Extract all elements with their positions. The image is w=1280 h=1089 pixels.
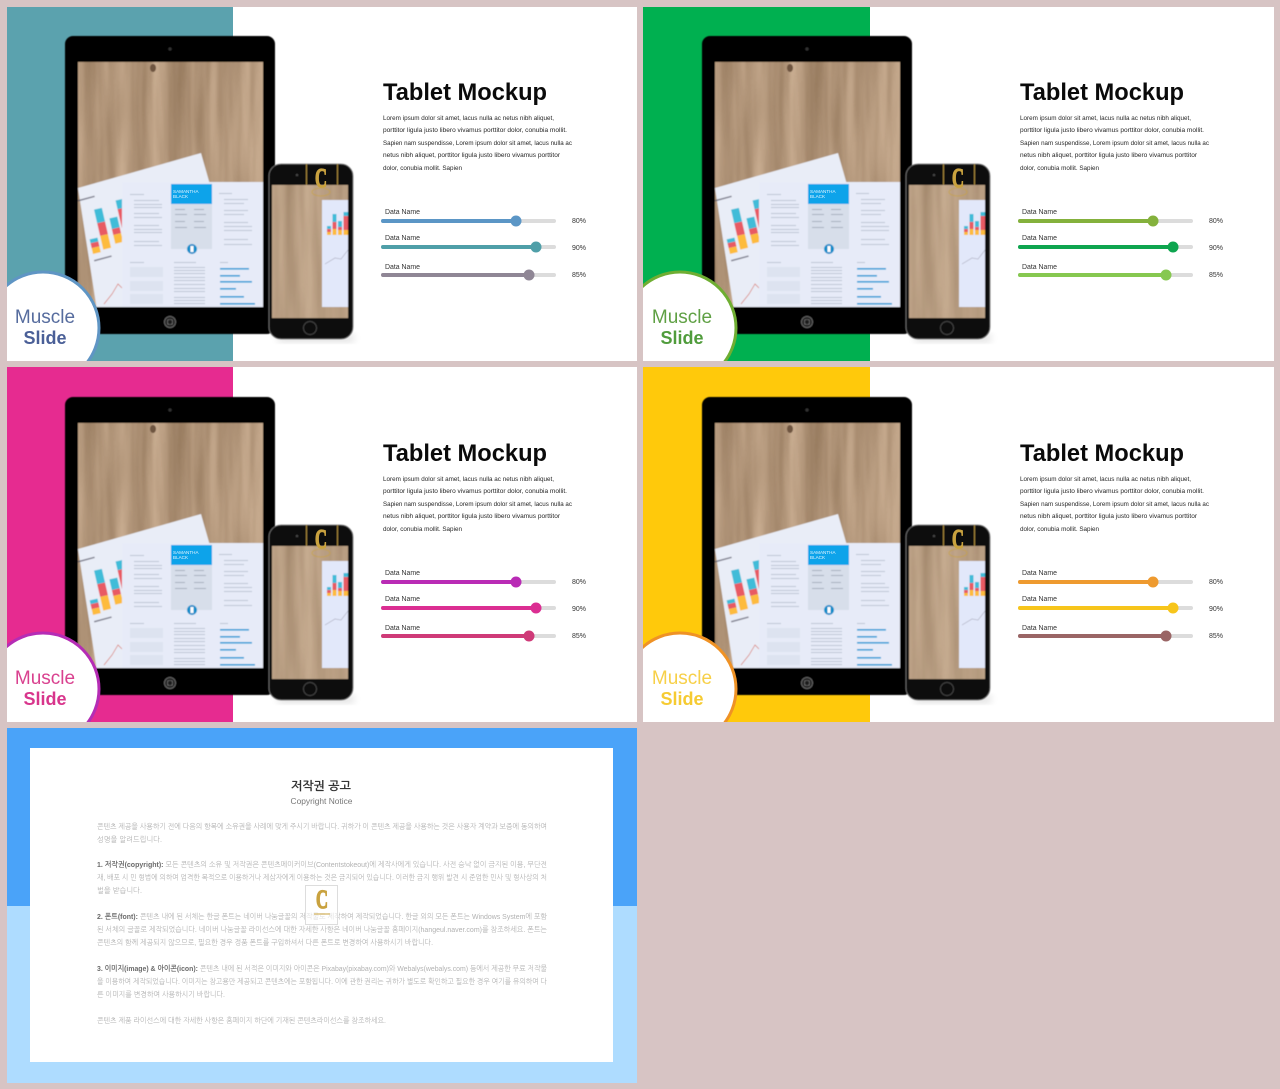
badge: Muscle Slide: [7, 632, 100, 722]
watermark: C: [315, 524, 327, 554]
body text: [383, 476, 573, 533]
body text: dolor, conubia mollit. Sapien: [383, 165, 462, 172]
paragraph 1: copyright: [97, 860, 547, 895]
slider: data 90%: Data Name: [1022, 596, 1057, 603]
slider: data 90%: 90%: [572, 245, 586, 252]
badge: Muscle Slide: [643, 632, 738, 722]
slider: data 80%: [1018, 209, 1223, 226]
badge: Muscle Slide: [643, 270, 738, 361]
resume header text: BLACK: [810, 555, 826, 560]
slider: data 85%: [1018, 625, 1223, 642]
intro paragraph: 성명을 알려드립니다.: [97, 835, 162, 844]
paragraph 2: font: 콘텐츠의 함께 제공되지 않으므로, 필요한 경우 정품 폰트를 구입하셔서 다른 폰트로 변경하여 사용하시기 바랍니다.: [97, 938, 433, 947]
badge: Muscle Slide: [7, 270, 100, 361]
heading: Tablet Mockup: [1020, 440, 1184, 467]
slider: data 85%: Data Name: [1022, 264, 1057, 271]
slider: data 90%: Data Name: [1022, 235, 1057, 242]
badge: Muscle Slide: Muscle: [15, 307, 75, 328]
notice subtitle: Copyright Notice: [291, 796, 353, 806]
tablet and phone mockup: [65, 36, 354, 342]
badge: Muscle Slide: Muscle: [15, 668, 75, 689]
badge: Muscle Slide: Slide: [660, 689, 704, 709]
paragraph 2: font: [97, 912, 548, 947]
resume header text: BLACK: [173, 194, 189, 199]
slider: data 80%: Data Name: [1022, 570, 1057, 577]
slider: data 85%: Data Name: [385, 264, 420, 271]
slider: data 90%: [1018, 235, 1223, 252]
colour band: [643, 367, 870, 722]
body text: Sapien nam suspendisse, Lorem ipsum dolor sit amet, lacus nulla ac: [1020, 501, 1210, 508]
body text: porttitor ligula justo libero vivamus porttitor dolor, conubia mollit.: [383, 127, 567, 134]
slider: data 90%: 90%: [572, 606, 586, 613]
body text: dolor, conubia mollit. Sapien: [1020, 165, 1099, 172]
resume header text: SAMANTHA: [810, 550, 836, 555]
slider: data 80%: [1018, 570, 1223, 588]
slider: data 85%: [1018, 264, 1223, 280]
slider: data 90%: 90%: [1209, 245, 1223, 252]
slider: data 85%: 85%: [1209, 633, 1223, 640]
badge: Muscle Slide: Slide: [23, 328, 67, 348]
slider: data 80%: 80%: [1209, 579, 1223, 586]
panel: copyright notice: [7, 728, 637, 1083]
resume header text: SAMANTHA: [173, 189, 199, 194]
slider: data 85%: Data Name: [385, 625, 420, 632]
slider: data 90%: Data Name: [385, 596, 420, 603]
closing note: 콘텐츠 제품 라이선스에 대한 자세한 사항은 홈페이지 하단에 기재된 콘텐츠라이선스를 참조하세요.: [97, 1016, 386, 1025]
badge: Muscle Slide: Muscle: [652, 668, 712, 689]
badge: Muscle Slide: Slide: [23, 689, 67, 709]
slider: data 90%: 90%: [1209, 606, 1223, 613]
resume header text: SAMANTHA: [810, 189, 836, 194]
watermark badge: [306, 885, 338, 924]
badge: Muscle Slide: Slide: [660, 328, 704, 348]
tablet and phone mockup: [702, 397, 991, 703]
slider: data 90%: [381, 596, 586, 614]
slider: data 85%: 85%: [572, 272, 586, 279]
body text: Sapien nam suspendisse, Lorem ipsum dolor sit amet, lacus nulla ac: [383, 140, 573, 147]
slider: data 80%: Data Name: [385, 209, 420, 216]
slider: data 85%: 85%: [1209, 272, 1223, 279]
slider: data 85%: Data Name: [1022, 625, 1057, 632]
slider: data 80%: [381, 209, 586, 226]
slider: data 80%: 80%: [572, 579, 586, 586]
paragraph 2: font: 된 서체의 글꼴로 제작되었습니다. 네이버 나눔글꼴 라이선스에 대한 자세한 사항은 네이버 나눔글꼴 홈페이지(hangeul.naver.com)를 참조하세요. 폰트는: [97, 925, 547, 934]
notice card: [30, 748, 613, 1062]
body text: netus nibh aliquet, porttitor ligula justo libero vivamus porttitor: [1020, 152, 1198, 159]
resume header text: SAMANTHA: [173, 550, 199, 555]
badge: Muscle Slide: Muscle: [652, 307, 712, 328]
panel: blue slide: [0, 7, 637, 384]
slider: data 80%: Data Name: [385, 570, 420, 577]
body text: netus nibh aliquet, porttitor ligula justo libero vivamus porttitor: [1020, 513, 1198, 520]
panel: yellow slide: [624, 367, 1274, 745]
slider: data 80%: [381, 570, 586, 588]
paragraph 3: image and icon: 을 이용하여 제작되었습니다. 이미지는 참고용만 제공되고 콘텐츠에는 포함됩니다. 이에 관한 권리는 귀하가 별도로 확인하고 필요한 경우 여기를 유의하여 다: [97, 977, 547, 986]
slider: data 90%: [1018, 596, 1223, 614]
heading: Tablet Mockup: [383, 440, 547, 467]
body text: Lorem ipsum dolor sit amet, lacus nulla ac netus nibh aliquet,: [1020, 115, 1191, 122]
paragraph 3: image and icon: 3. 이미지(image) & 아이콘(icon): 콘텐츠 내에 된 서적은 이미지와 아이콘은 Pixabay(pixabay.com)와 Webalys(webalys.com) 등에서 제공한 무료 저작물: [97, 964, 547, 973]
slider: data 90%: [381, 235, 586, 252]
body text: [1020, 476, 1210, 533]
body text: [383, 115, 573, 172]
watermark: C: [952, 524, 964, 554]
slider: data 80%: 80%: [572, 218, 586, 225]
resume header text: BLACK: [173, 555, 189, 560]
body text: Sapien nam suspendisse, Lorem ipsum dolor sit amet, lacus nulla ac: [383, 501, 573, 508]
watermark: C: [952, 163, 964, 193]
body text: netus nibh aliquet, porttitor ligula justo libero vivamus porttitor: [383, 513, 561, 520]
paragraph 3: image and icon: [97, 964, 547, 999]
paragraph 1: copyright: 벌을 받습니다.: [97, 886, 142, 895]
intro paragraph: [97, 822, 547, 844]
slider: data 85%: [381, 625, 586, 642]
tablet and phone mockup: [702, 36, 991, 342]
colour band: [7, 367, 233, 722]
slider: data 90%: Data Name: [385, 235, 420, 242]
tablet and phone mockup: [65, 397, 354, 703]
body text: porttitor ligula justo libero vivamus porttitor dolor, conubia mollit.: [383, 488, 567, 495]
body text: Lorem ipsum dolor sit amet, lacus nulla ac netus nibh aliquet,: [1020, 476, 1191, 483]
panel: pink slide: [0, 367, 637, 745]
watermark: C: [315, 163, 327, 193]
panel: green slide: [624, 7, 1274, 384]
colour band: [643, 7, 870, 361]
body text: Sapien nam suspendisse, Lorem ipsum dolor sit amet, lacus nulla ac: [1020, 140, 1210, 147]
paragraph 1: copyright: 1. 저작권(copyright): 모든 콘텐츠의 소유 및 저작권은 콘텐츠메이커이브(Contentstokeout)에 제작사에게 있습니다. 사전 승낙 없이 금지된 이용, 무단전: [97, 860, 547, 869]
colour band: [7, 7, 233, 361]
watermark badge: C: [316, 885, 328, 914]
body text: dolor, conubia mollit. Sapien: [1020, 526, 1099, 533]
resume header text: BLACK: [810, 194, 826, 199]
body text: netus nibh aliquet, porttitor ligula justo libero vivamus porttitor: [383, 152, 561, 159]
body text: dolor, conubia mollit. Sapien: [383, 526, 462, 533]
slider: data 85%: [381, 264, 586, 280]
heading: Tablet Mockup: [1020, 79, 1184, 106]
body text: porttitor ligula justo libero vivamus porttitor dolor, conubia mollit.: [1020, 127, 1204, 134]
paragraph 3: image and icon: 른 이미지를 변경하여 사용하시기 바랍니다.: [97, 990, 225, 999]
slider: data 85%: 85%: [572, 633, 586, 640]
paragraph 1: copyright: 재, 배포 시 민 형법에 의하여 엄격한 목적으로 이용하거나 제삼자에게 이용하는 것은 금지되어 있습니다. 이러한 금지 행위 발견 시 준엄한 민사 및 형사상의 처: [97, 873, 547, 882]
body text: [1020, 115, 1210, 172]
body text: porttitor ligula justo libero vivamus porttitor dolor, conubia mollit.: [1020, 488, 1204, 495]
slider: data 80%: Data Name: [1022, 209, 1057, 216]
intro paragraph: 콘텐츠 제공을 사용하기 전에 다음의 항목에 소유권을 사례에 맞게 주시기 바랍니다. 귀하가 이 콘텐츠 제공을 사용하는 것은 사용자 계약과 보증에 동의하여: [97, 822, 547, 831]
notice title: 저작권 공고: [291, 779, 352, 793]
heading: Tablet Mockup: [383, 79, 547, 106]
body text: Lorem ipsum dolor sit amet, lacus nulla ac netus nibh aliquet,: [383, 115, 554, 122]
slider: data 80%: 80%: [1209, 218, 1223, 225]
paragraph 2: font: 2. 폰트(font): 콘텐츠 내에 된 서체는 한글 폰트는 네이버 나눔글꼴의 저작물로 제작하여 제작되었습니다. 한글 외의 모든 폰트는 Windows System에 포함: [97, 912, 548, 921]
body text: Lorem ipsum dolor sit amet, lacus nulla ac netus nibh aliquet,: [383, 476, 554, 483]
